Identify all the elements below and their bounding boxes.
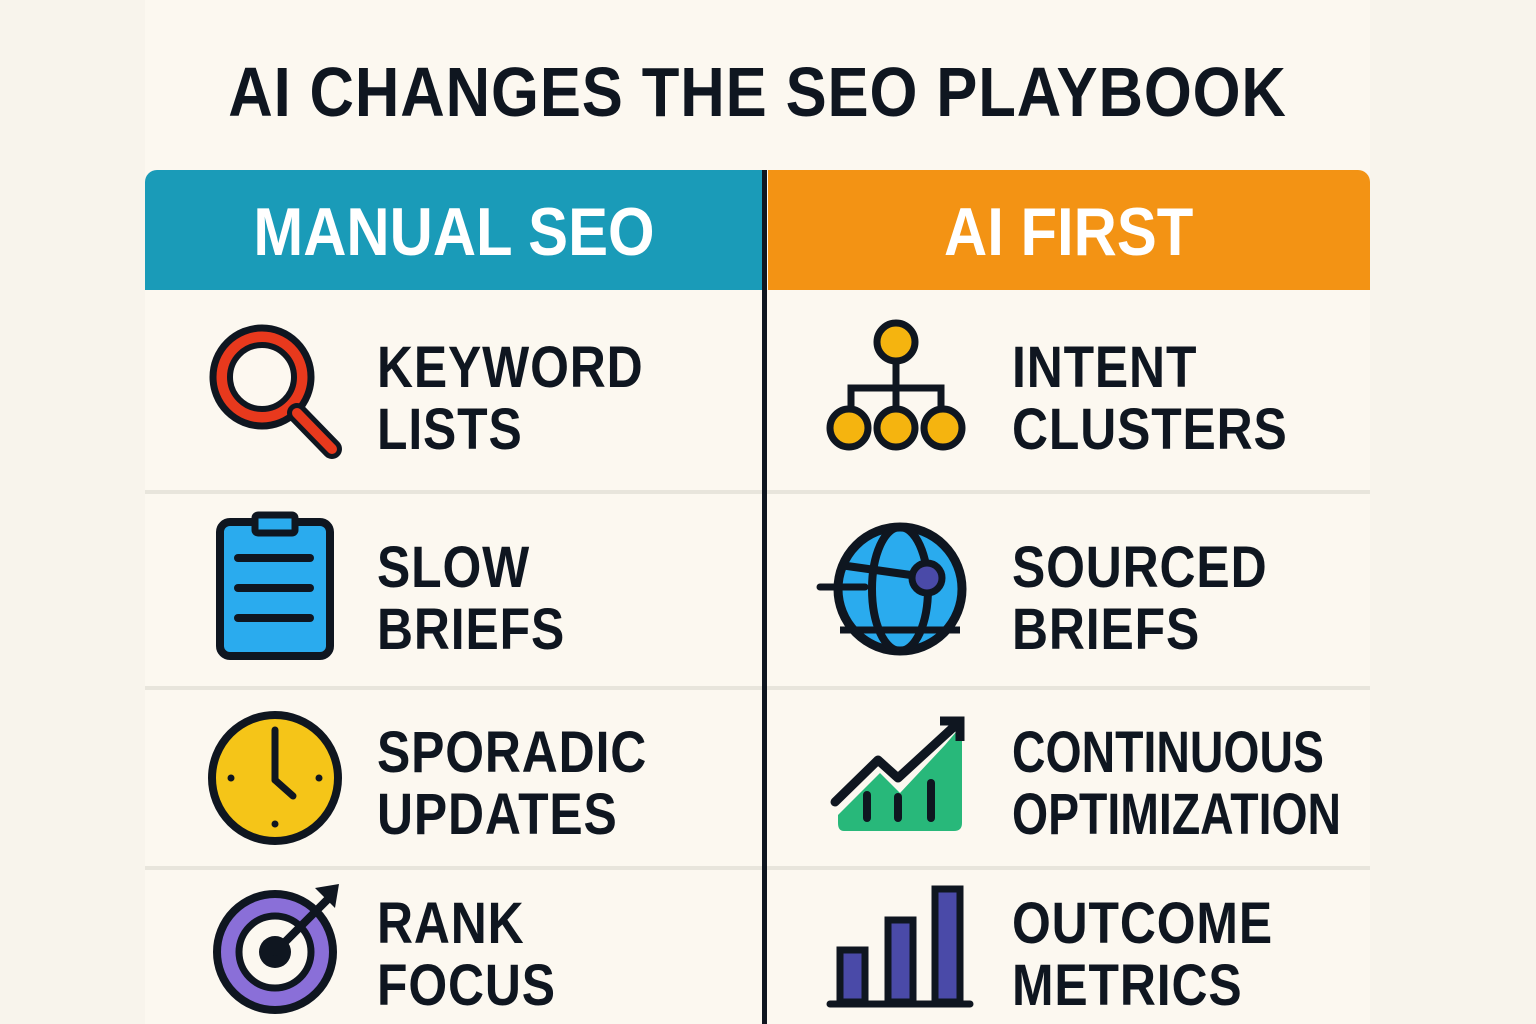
text: keyword lists: KEYWORD — [377, 335, 644, 400]
icon: globe — [816, 522, 966, 656]
text: intent clusters: CLUSTERS — [1012, 397, 1288, 462]
text: sourced briefs: BRIEFS — [1012, 597, 1200, 662]
divider — [762, 170, 767, 1024]
text: continuous optimization — [1012, 720, 1341, 847]
text: intent clusters — [1012, 335, 1288, 462]
header: manual seo: MANUAL SEO — [253, 194, 654, 270]
text: outcome metrics: METRICS — [1012, 953, 1242, 1018]
text: outcome metrics — [1012, 891, 1273, 1018]
icon: growth chart — [830, 716, 964, 831]
icon: magnifier — [210, 324, 342, 459]
icon: hierarchy — [826, 320, 966, 450]
header: ai first: AI FIRST — [944, 194, 1194, 270]
text: rank focus — [377, 891, 556, 1018]
text: outcome metrics: OUTCOME — [1012, 891, 1273, 956]
text: sporadic updates: UPDATES — [377, 782, 618, 847]
text: sourced briefs — [1012, 535, 1267, 662]
text: intent clusters: INTENT — [1012, 335, 1197, 400]
text: slow briefs: BRIEFS — [377, 597, 565, 662]
header: ai first — [768, 170, 1370, 290]
text: slow briefs — [377, 535, 565, 662]
header: manual seo — [145, 170, 762, 290]
text: continuous optimization: CONTINUOUS — [1012, 720, 1324, 785]
text: sourced briefs: SOURCED — [1012, 535, 1267, 600]
text: keyword lists: LISTS — [377, 397, 523, 462]
text: rank focus: FOCUS — [377, 953, 556, 1018]
text: rank focus: RANK — [377, 891, 525, 956]
text: keyword lists — [377, 335, 644, 462]
icon: bar chart — [826, 886, 974, 1008]
icon: clock — [208, 711, 342, 845]
title: AI CHANGES THE SEO PLAYBOOK — [228, 53, 1287, 131]
text: sporadic updates — [377, 720, 647, 847]
text: continuous optimization: OPTIMIZATION — [1012, 782, 1341, 847]
icon: clipboard — [216, 512, 334, 660]
text: sporadic updates: SPORADIC — [377, 720, 647, 785]
text: slow briefs: SLOW — [377, 535, 530, 600]
icon: target — [213, 884, 339, 1014]
